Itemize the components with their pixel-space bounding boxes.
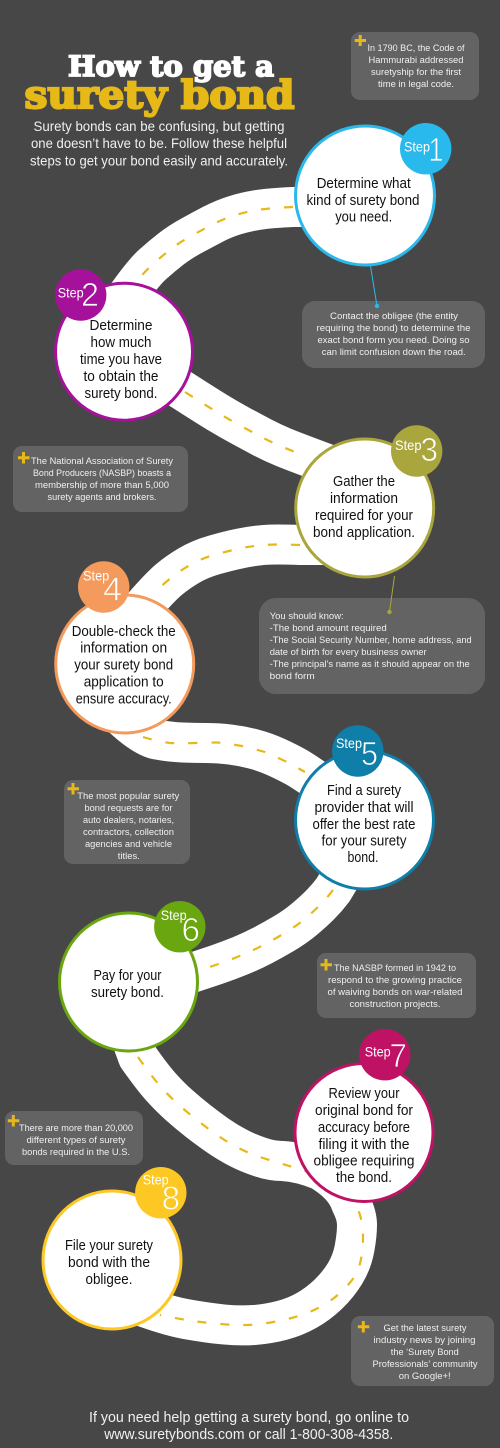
step 5: for your surety [322,834,407,850]
step 5: Find a surety [327,783,402,799]
fact note: 20,000 types [5,1111,143,1165]
fact note: Code of Hammurabi: suretyship for the first [371,67,461,78]
fact note: NASBP 1942 [317,953,476,1018]
road from step 3 to step 4 [140,544,340,610]
fact note: Code of Hammurabi: In 1790 BC, the Code of [368,43,465,54]
step 2: time you have [80,352,162,368]
intro text [30,118,288,168]
step 2 [55,269,192,420]
step 3: 3 [420,431,438,468]
fact note: Code of Hammurabi: time in legal code. [378,79,454,90]
fact note: NASBP membership [13,446,188,512]
note: you should know: You should know: [270,611,344,622]
fact note: Google+ community: Get the latest surety [384,1323,467,1334]
fact note: Code of Hammurabi: Hammurabi addressed [368,55,464,66]
note: you should know: bond form [270,671,315,682]
step 7: 7 [390,1037,407,1074]
step 7 [295,1029,433,1202]
fact note: NASBP 1942: respond to the growing practice [328,975,462,986]
step 5 [296,725,434,889]
step 7: Step [365,1044,391,1060]
step 1: kind of surety bond [306,193,420,209]
fact note: Google+ community: industry news by joining [374,1335,476,1346]
step 2: how much [90,335,152,351]
step 4: application to [84,675,164,691]
title: surety bond [24,72,294,117]
step 7: original bond for [315,1103,413,1119]
note: you should know: -The bond amount required [270,623,387,634]
intro text: steps to get your bond easily and accurately. [30,152,288,168]
step 6 [60,901,206,1051]
footer call to action: If you need help getting a surety bond, go online to [89,1410,409,1426]
intro text: one doesn’t have to be. Follow these helpful [31,135,287,151]
road from step 5 to step 6 [170,870,345,980]
step 7: accuracy before [318,1120,410,1136]
fact note: NASBP membership: surety agents and brokers. [48,492,156,503]
step 3: information [330,491,398,507]
footer call to action [89,1410,409,1443]
title: How to get a [68,50,274,83]
fact note: 20,000 types: There are more than 20,000 [19,1123,133,1134]
step 1 [296,123,451,265]
step 4: ensure accuracy. [76,692,172,708]
fact note: 20,000 types: different types of surety [26,1135,126,1146]
step 4: your surety bond [74,658,173,674]
fact note: NASBP 1942: of waiving bonds on war-related [328,987,462,998]
step 8: obligee. [86,1272,132,1288]
step 1: you need. [335,210,392,226]
step 3: required for your [315,508,413,524]
fact note: popular requests [64,780,190,864]
fact note: Code of Hammurabi [351,32,479,100]
title [24,50,294,117]
note: you should know [259,598,485,694]
fact note: popular requests: auto dealers, notaries, [83,815,174,826]
fact note: popular requests: titles. [118,851,140,862]
road from step 2 to step 3 [160,376,330,465]
step 2: Step [58,284,84,300]
step 7: obligee requiring [314,1154,414,1170]
note: you should know: date of birth for every business owner [270,647,427,658]
step 1: 1 [428,131,444,168]
fact note: NASBP membership: Bond Producers (NASBP) boasts a [33,468,172,479]
note: contact the obligee [302,301,485,368]
fact note: 20,000 types: bonds required in the U.S. [22,1147,130,1158]
fact note: popular requests: bond requests are for [84,803,173,814]
fact note: popular requests: contractors, collection [83,827,174,838]
step 3: Step [395,437,422,453]
step 4: information on [80,641,167,657]
note: you should know: -The principal’s name as it should appear on the [270,659,470,670]
step 6: surety bond. [91,985,164,1001]
step 3: Gather the [333,474,395,490]
fact note: popular requests: The most popular surety [77,791,179,802]
step 3 [296,425,442,577]
fact note: popular requests: agencies and vehicle [85,839,172,850]
step 8 [43,1167,186,1329]
step 4: Step [83,568,109,584]
step 1: Step [404,138,430,154]
road from step 1 to step 2 [124,207,330,300]
step 7: filing it with the [318,1137,410,1153]
step 5: offer the best rate [312,817,416,833]
fact note: NASBP 1942: The NASBP formed in 1942 to [334,963,456,974]
step 5: bond. [348,850,378,866]
step 8: 8 [162,1180,180,1217]
step 4: 4 [103,571,122,608]
step 6: Step [161,907,187,923]
step 4 [56,561,194,733]
step 4: Double-check the [72,624,176,640]
step 2: Determine [90,318,152,334]
fact note: Google+ community [351,1316,494,1386]
step 7: Review your [328,1086,400,1102]
connector: step 1 to note [370,266,379,308]
step 8: bond with the [68,1255,150,1271]
step 5: provider that will [314,800,414,816]
note: contact the obligee: Contact the obligee (the entity [330,311,458,322]
step 8: File your surety [65,1238,154,1254]
footer call to action: www.suretybonds.com or call 1-800-308-4358. [103,1427,393,1443]
fact note: Google+ community: the ‘Surety Bond [391,1347,459,1358]
intro text: Surety bonds can be confusing, but getting [34,118,284,134]
fact note: NASBP 1942: construction projects. [350,999,440,1010]
step 1: Determine what [317,176,411,192]
note: you should know: -The Social Security Number, home address, and [270,635,472,646]
road from step 6 past step 7 to step 8 [120,1035,363,1325]
step 5: 5 [361,735,378,772]
step 2: surety bond. [84,386,158,402]
step 2: to obtain the [84,369,158,385]
note: contact the obligee: exact bond form you need. Doing so [318,335,470,346]
step 5: Step [336,735,362,751]
connector: step 3 to note [387,576,394,614]
step 8: Step [143,1172,169,1188]
fact note: NASBP membership: The National Association of Surety [31,456,173,467]
fact note: NASBP membership: membership of more than 5,000 [35,480,169,491]
fact note: Google+ community: Professionals’ community [372,1359,478,1370]
step 6: Pay for your [94,968,162,984]
step 3: bond application. [313,525,415,541]
step 2: 2 [81,276,99,313]
fact note: Google+ community: on Google+! [399,1371,451,1382]
note: contact the obligee: can limit confusion down the road. [322,347,466,358]
note: contact the obligee: requiring the bond) to determine the [316,323,470,334]
step 7: the bond. [336,1170,392,1186]
road from step 4 to step 5 [120,715,330,790]
step 6: 6 [182,911,200,948]
